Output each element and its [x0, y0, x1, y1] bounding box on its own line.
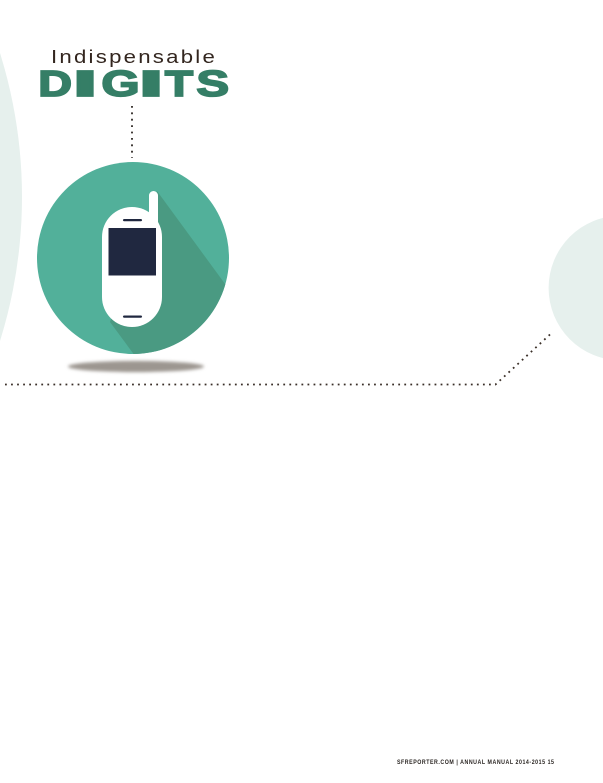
- title line: DIGITS: D: [38, 63, 72, 104]
- title: [38, 48, 229, 104]
- ground shadow: [68, 361, 204, 372]
- title line: DIGITS: I: [73, 63, 97, 104]
- badge circle: [37, 162, 229, 354]
- phone antenna: [149, 191, 158, 231]
- phone bottom speaker: [123, 316, 142, 318]
- dotted connector horizontal and diagonal: [5, 334, 550, 384]
- icon: phone badge: [37, 162, 230, 360]
- phone screen: [108, 228, 156, 276]
- title line: Indispensable: Indispensable: [51, 48, 215, 68]
- title line: DIGITS: S: [196, 63, 229, 104]
- phone top speaker: [123, 219, 142, 221]
- dotted connector vertical: [131, 106, 133, 158]
- background circle right: [549, 216, 603, 360]
- phone body: [102, 207, 162, 327]
- title line: DIGITS: [38, 63, 229, 104]
- title line: DIGITS: I: [139, 63, 163, 104]
- long shadow: [110, 191, 230, 360]
- background circle left: [0, 0, 22, 679]
- title line: DIGITS: G: [102, 63, 140, 104]
- footer: SFREPORTER.COM | ANNUAL MANUAL 2014-2015 15: [397, 760, 555, 766]
- title line: DIGITS: T: [165, 63, 193, 104]
